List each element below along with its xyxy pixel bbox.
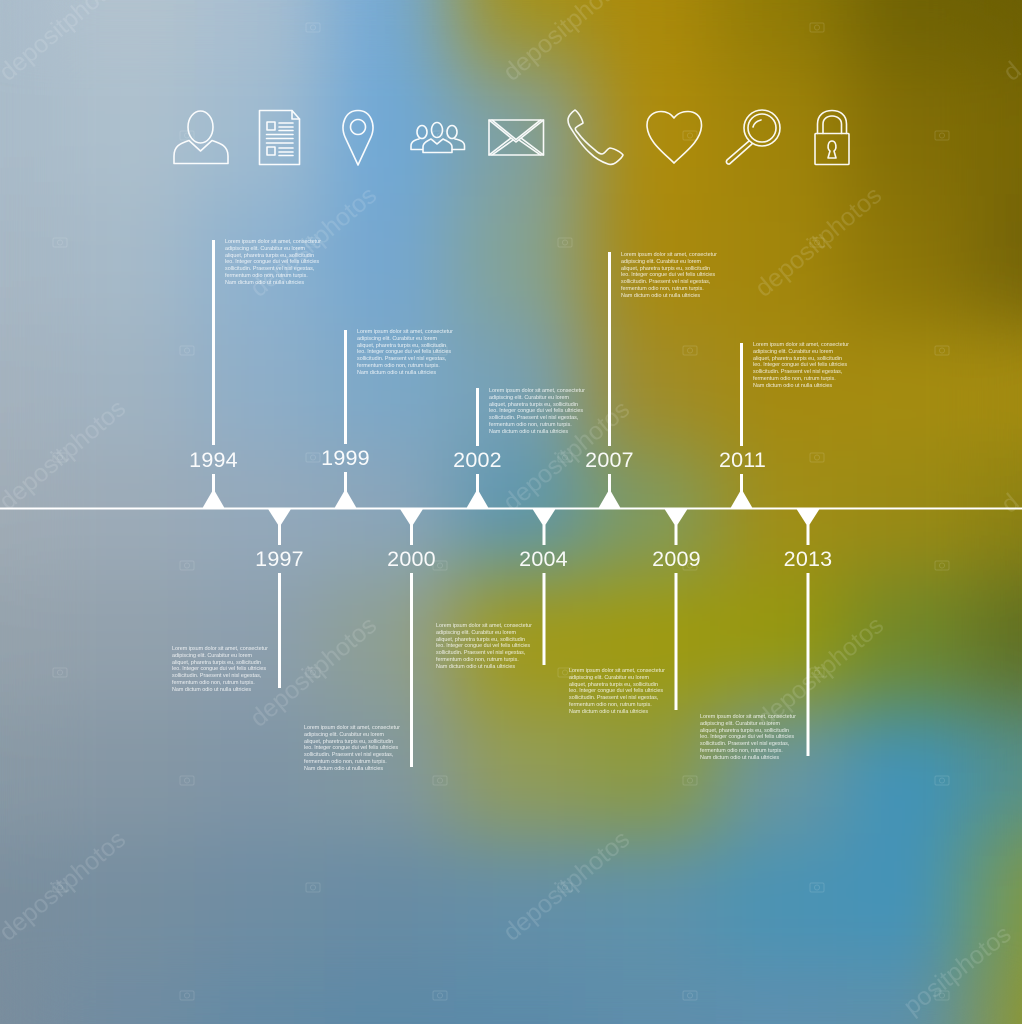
text block 2007: Lorem ipsum dolor sit amet, consectetur adipiscing elit. Curabitur eu lorem aliquet, pharetra turpis eu, sollicitudin leo. Integer congue dui vel felis ultricies sollicitudin. Praesent vel nisl egestas, fermentum odio non, rutrum turpis. Nam dictum odio ut nulla ultricies — [621, 252, 717, 298]
watermark pattern: depositphotos — [245, 611, 382, 733]
marker 2007 — [598, 252, 620, 508]
watermark pattern: depositphotos — [498, 825, 635, 947]
watermark pattern: depositphotos — [752, 611, 889, 733]
year 2004: 2004 — [519, 547, 568, 571]
year 2007: 2007 — [585, 448, 634, 472]
watermark pattern: positphotos — [898, 920, 1016, 1021]
watermark pattern: depositphotos — [750, 181, 887, 303]
icon: heart — [647, 112, 702, 163]
icon: envelope — [489, 120, 544, 155]
icon: map pin — [343, 110, 373, 165]
marker 1999 — [334, 330, 356, 508]
year 2011: 2011 — [719, 448, 766, 472]
year 2000: 2000 — [387, 547, 436, 571]
watermark pattern: depositphotos — [245, 181, 382, 303]
marker 2009 — [664, 509, 688, 710]
icon: padlock — [815, 110, 849, 164]
icon: document — [260, 110, 300, 164]
watermark pattern: depositphotos — [498, 395, 635, 517]
marker 2011 — [730, 343, 752, 508]
text block 2013: Lorem ipsum dolor sit amet, consectetur adipiscing elit. Curabitur eu lorem aliquet, pharetra turpis eu, sollicitudin leo. Integer congue dui vel felis ultricies sollicitudin. Praesent vel nisl egestas, fermentum odio non, rutrum turpis. Nam dictum odio ut nulla ultricies — [700, 714, 796, 760]
text block 2009: Lorem ipsum dolor sit amet, consectetur adipiscing elit. Curabitur eu lorem aliquet, pharetra turpis eu, sollicitudin leo. Integer congue dui vel felis ultricies sollicitudin. Praesent vel nisl egestas, fermentum odio non, rutrum turpis. Nam dictum odio ut nulla ultricies — [569, 668, 665, 714]
marker 1997 — [268, 509, 291, 688]
icon: person — [174, 111, 228, 164]
marker 2000 — [400, 509, 423, 767]
text block 1999: Lorem ipsum dolor sit amet, consectetur adipiscing elit. Curabitur eu lorem aliquet, pharetra turpis eu, sollicitudin leo. Integer congue dui vel felis ultricies sollicitudin. Praesent vel nisl egestas, fermentum odio non, rutrum turpis. Nam dictum odio ut nulla ultricies — [357, 329, 453, 376]
year 1999: 1999 — [321, 446, 370, 470]
icon: telephone handset — [568, 110, 623, 164]
year 1997: 1997 — [255, 547, 304, 571]
year 2013: 2013 — [784, 547, 832, 571]
marker 2002 — [466, 388, 488, 508]
text block 2002: Lorem ipsum dolor sit amet, consectetur adipiscing elit. Curabitur eu lorem aliquet, pharetra turpis eu, sollicitudin leo. Integer congue dui vel felis ultricies sollicitudin. Praesent vel nisl egestas, fermentum odio non, rutrum turpis. Nam dictum odio ut nulla ultricies — [489, 388, 585, 434]
text block 1994: Lorem ipsum dolor sit amet, consectetur adipiscing elit. Curabitur eu lorem aliquet, pharetra turpis eu, sollicitudin leo. Integer congue dui vel felis ultricies sollicitudin. Praesent vel nisl egestas, fermentum odio non, rutrum turpis. Nam dictum odio ut nulla ultricies — [225, 239, 321, 286]
marker 1994 — [202, 240, 224, 508]
text block 2004: Lorem ipsum dolor sit amet, consectetur adipiscing elit. Curabitur eu lorem aliquet, pharetra turpis eu, sollicitudin leo. Integer congue dui vel felis ultricies sollicitudin. Praesent vel nisl egestas, fermentum odio non, rutrum turpis. Nam dictum odio ut nulla ultricies — [436, 623, 532, 670]
year 2002: 2002 — [453, 448, 502, 472]
text block 1997: Lorem ipsum dolor sit amet, consectetur adipiscing elit. Curabitur eu lorem aliquet, pharetra turpis eu, sollicitudin leo. Integer congue dui vel felis ultricies sollicitudin. Praesent vel nisl egestas, fermentum odio non, rutrum turpis. Nam dictum odio ut nulla ultricies — [172, 646, 268, 692]
year 1994: 1994 — [189, 448, 238, 472]
axis line — [0, 508, 1022, 510]
icon: magnifying glass — [726, 110, 780, 164]
text block 2011: Lorem ipsum dolor sit amet, consectetur adipiscing elit. Curabitur eu lorem aliquet, pharetra turpis eu, sollicitudin leo. Integer congue dui vel felis ultricies sollicitudin. Praesent vel nisl egestas, fermentum odio non, rutrum turpis. Nam dictum odio ut nulla ultricies — [753, 342, 849, 388]
year 2009: 2009 — [652, 547, 701, 571]
text block 2000: Lorem ipsum dolor sit amet, consectetur adipiscing elit. Curabitur eu lorem aliquet, pharetra turpis eu, sollicitudin leo. Integer congue dui vel felis ultricies sollicitudin. Praesent vel nisl egestas, fermentum odio non, rutrum turpis. Nam dictum odio ut nulla ultricies — [304, 725, 400, 772]
marker 2004 — [532, 509, 556, 665]
icon: group of people — [411, 122, 464, 152]
marker 2013 — [796, 509, 820, 756]
